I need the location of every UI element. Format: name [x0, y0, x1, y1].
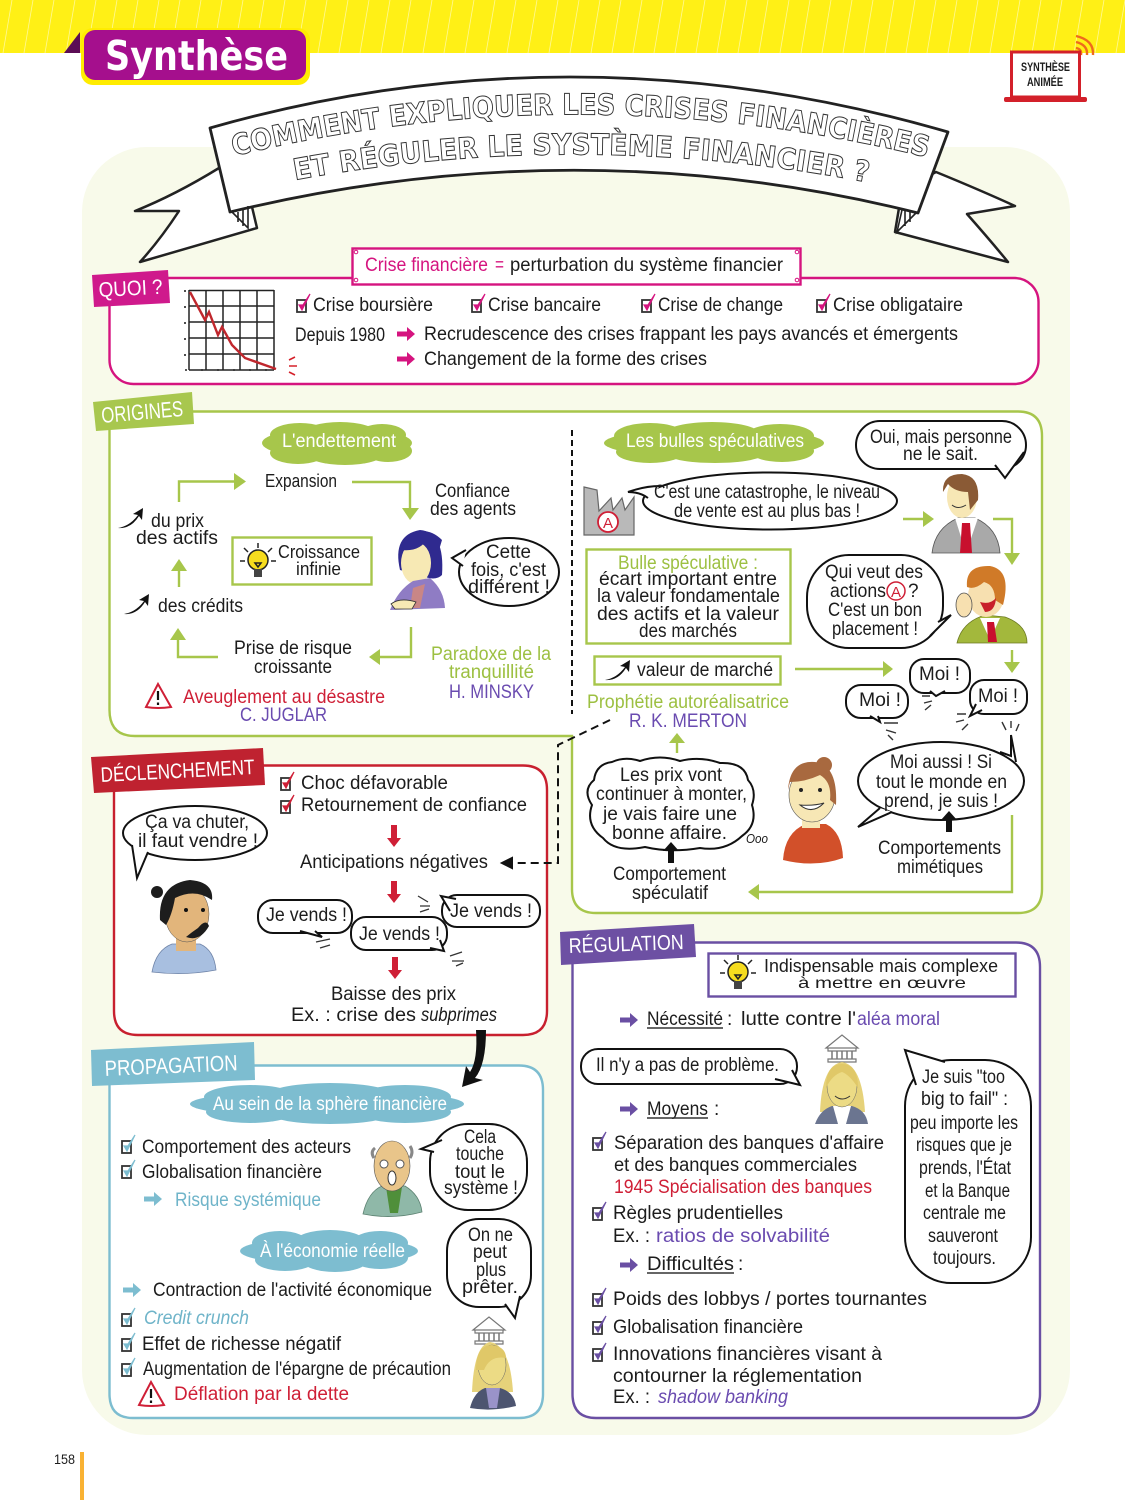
cloud: Au sein de la sphère financière [190, 1083, 464, 1124]
box: Bulle spéculative: des actifs et la valeur [597, 604, 780, 625]
text: contraction and effects: Effet de richesse négatif [142, 1334, 342, 1355]
speech bubble: Il n'y a pas de problème: Il n'y a pas de problème. [596, 1055, 779, 1076]
icon: synthèse animée laptop [1004, 36, 1093, 102]
text: hausse du prix des actifs [118, 508, 218, 549]
text: Paradoxe de la tranquillité [431, 644, 551, 703]
text: Prophétie autoréalisatrice: Prophétie autoréalisatrice [587, 692, 789, 713]
text: Confiance des agents: Confiance [435, 481, 510, 502]
speech bubble: Qui veut des actions: placement ! [832, 619, 918, 640]
speech bubble: Cette fois, c'est différent [452, 538, 559, 606]
checklist: difficultés: Globalisation financière [613, 1317, 803, 1338]
icon: synthèse animée laptop: ANIMÉE [1027, 74, 1063, 89]
text: Comportement spéculatif: Comportement [613, 864, 727, 885]
box: Bulle spéculative: des marchés [639, 621, 737, 642]
box: valeur de marché: valeur de marché [637, 660, 773, 681]
speech bubble: Qui veut des actions: actions [830, 581, 886, 602]
speech bubbles: Je vends: Je vends ! [359, 924, 440, 945]
text: Prise de risque croissante: croissante [254, 657, 332, 678]
warning: Aveuglement au désastre: Aveuglement au désastre [183, 687, 385, 708]
text: contraction and effects [122, 1280, 451, 1380]
chart: falling curve [185, 290, 297, 375]
label: DÉCLENCHEMENT [91, 748, 265, 793]
speech bubble: Ça va chuter: Ça va chuter, [145, 812, 249, 833]
text: Baisse des prix: subprimes [421, 1005, 497, 1026]
speech bubble: Cela touche tout le système: touche [456, 1144, 504, 1165]
label: QUOI [92, 270, 170, 307]
checklist: types of crises [297, 294, 963, 316]
speech bubbles: Je vends: Je vends ! [450, 901, 532, 922]
thought bubble: Les prix vont continuer: continuer à monter, [596, 784, 747, 805]
text: Comportement spéculatif: spéculatif [632, 883, 709, 904]
speech bubble: too big to fail: risques que je [916, 1135, 1012, 1156]
text: Comportements mimétiques: Comportements [878, 838, 1001, 859]
speech bubble: too big to fail: peu importe les [910, 1113, 1018, 1134]
arrow: red down [387, 825, 401, 847]
thought bubble: Les prix vont continuer: Ooo [746, 831, 768, 846]
cloud: L'endettement: L'endettement [282, 431, 397, 452]
speech bubble: too big to fail: toujours. [933, 1248, 996, 1269]
character: central banker woman [470, 1317, 516, 1410]
checklist: difficultés [593, 1288, 927, 1408]
checklist: sphère financière: Risque systémique [175, 1190, 321, 1211]
speech bubble: Qui veut des actions: A [891, 584, 901, 601]
text: contraction and effects: Credit crunch [144, 1308, 249, 1329]
text: Moyens: : [714, 1099, 719, 1120]
speech bubble: Cela touche tout le système [421, 1124, 527, 1210]
box: Croissance infinie [232, 538, 372, 584]
text: hausse du prix des actifs: du prix [151, 511, 204, 532]
speech bubble: On ne peut plus prêter: plus [476, 1260, 506, 1281]
speech bubbles: Moi: Moi ! [919, 664, 960, 685]
box: Bulle spéculative: Bulle spéculative : [618, 553, 758, 574]
checklist: moyens: et des banques commerciales [614, 1155, 857, 1176]
arrows: bubble sequence [669, 511, 1020, 900]
speech bubble: Oui, mais personne ne le sait: Oui, mais personne [870, 427, 1012, 448]
text: Prise de risque croissante: Prise de risque [234, 638, 352, 659]
text: Comportement spéculatif [613, 864, 727, 904]
icon: synthèse animée laptop: SYNTHÈSE [1021, 59, 1070, 74]
panel: DÉCLENCHEMENT [91, 720, 610, 1035]
text: Nécessité: lutte contre l' [741, 1009, 856, 1030]
text: Moyens [620, 1099, 719, 1120]
speech bubble: Oui, mais personne ne le sait [856, 421, 1026, 478]
text: Difficultés: : [738, 1254, 743, 1275]
speech bubbles: Je vends: Je vends ! [266, 905, 347, 926]
character: man with red curly hair [956, 566, 1027, 643]
character: woman with blue hair [390, 530, 445, 610]
speech bubble: too big to fail: centrale me [923, 1203, 1006, 1224]
speech bubble: Qui veut des actions: Qui veut des [825, 562, 923, 583]
warning: Déflation par la dette: Déflation par la dette [174, 1384, 349, 1405]
speech bubble: Cela touche tout le système: système ! [444, 1178, 518, 1199]
text: Prise de risque croissante [234, 638, 352, 678]
speech bubble: too big to fail: sauveront [928, 1226, 999, 1247]
text: contraction and effects: Augmentation de l'épargne de précaution [143, 1359, 451, 1380]
text: Paradoxe de la tranquillité: Paradoxe de la [431, 644, 551, 665]
character: man in grey suit [932, 474, 1000, 553]
text: Paradoxe de la tranquillité: H. MINSKY [449, 682, 534, 703]
checklist: difficultés: Innovations financières visant à [613, 1344, 882, 1365]
label: DÉCLENCHEMENT: DÉCLENCHEMENT [100, 756, 255, 787]
page number [54, 1451, 84, 1500]
page number: 158 [54, 1451, 75, 1467]
cloud: Les bulles spéculatives [604, 422, 824, 463]
text: depuis 1980 [295, 324, 958, 370]
box: Indispensable mais complexe: à mettre en œuvre [798, 975, 966, 992]
speech bubble: Moi aussi [858, 735, 1024, 827]
speech bubbles: Je vends [258, 895, 540, 966]
text: Comportements mimétiques: mimétiques [897, 857, 983, 878]
header band [0, 0, 1125, 53]
speech bubble: too big to fail [905, 1050, 1031, 1283]
section tab: Synthèse [64, 28, 310, 85]
box: Indispensable mais complexe: Indispensable mais complexe [764, 956, 998, 976]
speech bubble: Qui veut des actions: ? [908, 581, 919, 602]
speech bubble: Cette fois, c'est différent: fois, c'est [471, 560, 547, 581]
cycle arrows [170, 473, 419, 665]
definition box: perturbation du système financier [510, 255, 784, 276]
text: Nécessité: Nécessité [647, 1009, 723, 1030]
speech bubble: too big to fail: Je suis "too [922, 1067, 1005, 1088]
title ribbon: ET RÉGULER LE SYSTÈME FINANCIER ? [293, 128, 870, 182]
text: depuis 1980: Recrudescence des crises frappant les pays avancés et émergents [424, 324, 958, 345]
speech bubble: On ne peut plus prêter: prêter. [462, 1277, 518, 1298]
arrow: black up to bubble [941, 811, 957, 832]
character: banker woman smiling [815, 1035, 868, 1124]
text: Difficultés: Difficultés [647, 1254, 734, 1275]
speech bubbles: Moi: Moi ! [978, 686, 1018, 707]
checklist: moyens: Règles prudentielles [613, 1203, 783, 1224]
speech bubble: Il n'y a pas de problème [581, 1049, 800, 1085]
speech bubble: Ça va chuter [123, 806, 267, 878]
character: old man [363, 1141, 422, 1217]
checklist: causes [281, 772, 527, 816]
arrow: black up to thought bubble [663, 842, 679, 863]
checklist: moyens: ratios de solvabilité [656, 1226, 830, 1247]
checklist: difficultés: Poids des lobbys / portes tournantes [613, 1289, 927, 1310]
checklist: difficultés: Ex. : [613, 1387, 650, 1408]
speech bubble: Cela touche tout le système: Cela [464, 1127, 496, 1148]
checklist: moyens: Ex. : [613, 1226, 650, 1247]
checklist: moyens: 1945 Spécialisation des banques [614, 1177, 872, 1198]
label: RÉGULATION: RÉGULATION [568, 931, 684, 958]
panel: RÉGULATION [560, 924, 1040, 1418]
speech bubble: Cela touche tout le système: tout le [455, 1162, 505, 1183]
text: Nécessité: aléa moral [857, 1009, 940, 1030]
section tab: Synthèse: Synthèse [105, 32, 288, 80]
speech bubble: Oui, mais personne ne le sait: ne le sait. [903, 444, 978, 465]
box: valeur de marché [594, 656, 780, 684]
text: Prophétie autoréalisatrice: R. K. MERTON [629, 711, 747, 732]
text: Baisse des prix [291, 984, 497, 1026]
character: woman with bun [783, 757, 843, 864]
warning: Aveuglement au désastre [146, 684, 385, 726]
text: Nécessité: : [727, 1009, 732, 1030]
text: Difficultés [620, 1254, 743, 1275]
checklist: difficultés: contourner la réglementation [613, 1366, 862, 1387]
box: Bulle spéculative: la valeur fondamentale [597, 586, 780, 607]
text: depuis 1980: Changement de la forme des crises [424, 349, 707, 370]
text: Prophétie autoréalisatrice [587, 692, 789, 732]
panel: ORIGINES [93, 392, 1042, 913]
arrow: red down [388, 957, 402, 979]
text: Comportements mimétiques [878, 838, 1001, 878]
box: Indispensable mais complexe [708, 954, 1016, 996]
text: Expansion: Expansion [265, 471, 337, 491]
text: contraction and effects: Contraction de l'activité économique [153, 1280, 432, 1301]
cloud: À l'économie réelle [240, 1230, 418, 1272]
text: Moyens: Moyens [647, 1099, 708, 1120]
icon: factory A [584, 487, 634, 535]
checklist: moyens: Séparation des banques d'affaire [614, 1133, 884, 1154]
checklist: types of crises: Crise boursière [313, 295, 433, 316]
arrow: dashed link to bubbles [502, 720, 610, 868]
definition box: Crise financière [365, 255, 488, 276]
thought bubble: Les prix vont continuer: je vais faire une [602, 804, 737, 825]
text: Paradoxe de la tranquillité: tranquillité [449, 662, 534, 683]
warning: Aveuglement au désastre: C. JUGLAR [240, 705, 327, 726]
speech bubble: catastrophe: C'est une catastrophe, le niveau [654, 482, 880, 503]
thought bubble: Les prix vont continuer: bonne affaire. [612, 823, 727, 844]
thought bubble: Les prix vont continuer: Les prix vont [620, 765, 723, 786]
cloud: Au sein de la sphère financière: Au sein de la sphère financière [213, 1094, 447, 1115]
speech bubble: On ne peut plus prêter: peut [473, 1242, 508, 1263]
box: Bulle spéculative [586, 550, 790, 644]
background panel [82, 147, 1070, 1435]
definition box [352, 248, 800, 284]
speech bubble: Moi aussi: prend, je suis ! [884, 791, 998, 812]
text: Baisse des prix: Ex. : crise des [291, 1005, 416, 1026]
cloud: À l'économie réelle: À l'économie réelle [260, 1241, 405, 1262]
panel: PROPAGATION [91, 1042, 543, 1418]
icon: factory A: A [603, 515, 613, 532]
arrow: red down [387, 881, 401, 903]
text: Anticipations négatives: Anticipations négatives [300, 852, 488, 873]
cloud: L'endettement [262, 422, 412, 465]
text: Baisse des prix: Baisse des prix [331, 984, 456, 1005]
label: RÉGULATION [560, 924, 696, 965]
cloud: Les bulles spéculatives: Les bulles spéculatives [626, 431, 804, 452]
label: PROPAGATION [91, 1042, 255, 1086]
box: Bulle spéculative: écart important entre [599, 569, 777, 590]
title ribbon [134, 76, 1016, 264]
checklist: types of crises: Crise bancaire [488, 295, 601, 316]
checklist: causes: Choc défavorable [301, 773, 448, 794]
box: Croissance infinie: Croissance [278, 542, 360, 562]
speech bubble: too big to fail: big to fail" : [921, 1089, 1008, 1110]
speech bubble: Moi aussi: Moi aussi ! Si [890, 752, 992, 773]
checklist: types of crises: Crise de change [658, 295, 783, 316]
speech bubble: On ne peut plus prêter: On ne [468, 1225, 513, 1246]
box: Croissance infinie: infinie [296, 559, 341, 579]
text: depuis 1980: Depuis 1980 [295, 325, 385, 346]
speech bubbles: Moi: Moi ! [859, 690, 901, 711]
text: hausse du prix des actifs: des actifs [136, 528, 218, 549]
speech bubble: catastrophe: de vente est au plus bas ! [674, 501, 860, 522]
checklist: sphère financière [122, 1135, 351, 1211]
label: PROPAGATION: PROPAGATION [104, 1050, 238, 1081]
speech bubbles: Moi [846, 659, 1027, 740]
speech bubble: On ne peut plus prêter [447, 1219, 531, 1318]
text: hausse des crédits: des crédits [158, 596, 243, 617]
definition box: = [495, 255, 504, 276]
title ribbon: COMMENT EXPLIQUER LES CRISES FINANCIÈRES [232, 92, 930, 156]
text: hausse des crédits [124, 594, 243, 617]
character: man with bun [151, 880, 216, 974]
speech bubble: Ça va chuter: il faut vendre ! [138, 831, 258, 852]
label: QUOI: QUOI ? [98, 276, 163, 302]
panel: QUOI [92, 248, 1038, 384]
speech bubble: Qui veut des actions: C'est un bon [828, 600, 922, 621]
speech bubble: Cette fois, c'est différent: Cette [486, 542, 531, 563]
text: Confiance des agents: des agents [430, 499, 516, 520]
label: ORIGINES: ORIGINES [100, 396, 184, 428]
thought bubble: Les prix vont continuer [587, 758, 768, 850]
speech bubble: Moi aussi: tout le monde en [876, 772, 1007, 793]
speech bubble: Qui veut des actions [807, 555, 951, 648]
speech bubble: catastrophe [628, 472, 897, 530]
speech bubble: too big to fail: et la Banque [925, 1181, 1010, 1202]
speech bubble: too big to fail: prends, l'État [919, 1158, 1012, 1179]
speech bubble: Cette fois, c'est différent: différent ! [468, 577, 550, 598]
checklist: sphère financière: Comportement des acteurs [142, 1137, 351, 1158]
text: Confiance des agents [430, 481, 516, 520]
checklist: difficultés: shadow banking [658, 1387, 788, 1408]
checklist: moyens [593, 1132, 884, 1247]
checklist: types of crises: Crise obligataire [833, 295, 963, 316]
checklist: causes: Retournement de confiance [301, 795, 527, 816]
text: Nécessité [620, 1009, 940, 1030]
checklist: sphère financière: Globalisation financière [142, 1162, 322, 1183]
arrow: from déclenchement to propagation [462, 1030, 486, 1087]
